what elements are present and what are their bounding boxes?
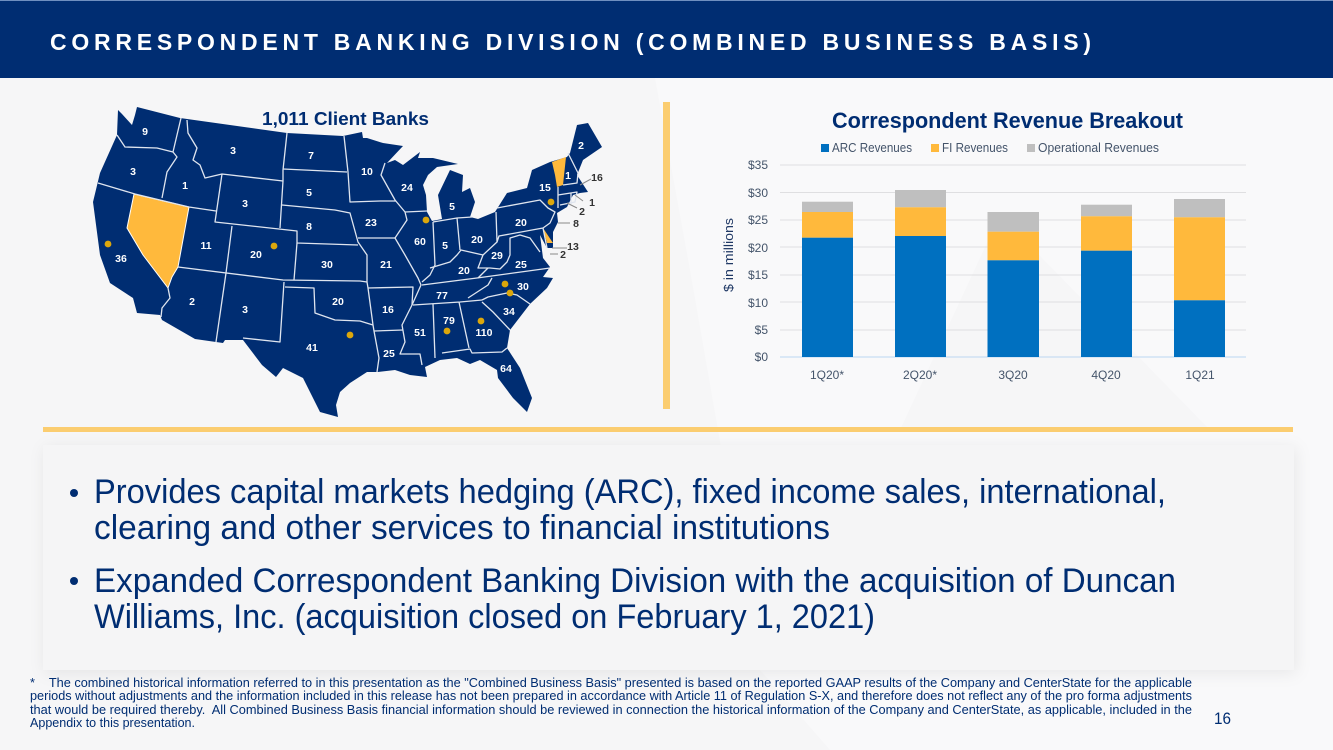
state client counts: 21 <box>380 259 392 271</box>
state client counts: 60 <box>414 236 426 248</box>
state client counts: 20 <box>332 296 344 308</box>
state client counts <box>115 126 584 375</box>
leader lines <box>550 179 591 254</box>
gridlines <box>780 165 1246 330</box>
small state counts: 2 <box>579 206 585 218</box>
state client counts: 41 <box>306 342 318 354</box>
state client counts: 29 <box>491 250 503 262</box>
state client counts: 2 <box>578 140 584 152</box>
bar: 2Q20 <box>895 190 946 357</box>
y axis labels: $20 <box>748 241 768 255</box>
state client counts: 3 <box>230 145 236 157</box>
y axis labels: $30 <box>748 186 768 200</box>
bullet one <box>70 473 1166 547</box>
chart title: Correspondent Revenue Breakout <box>832 108 1184 133</box>
state client counts: 3 <box>130 166 136 178</box>
state client counts: 51 <box>414 327 426 339</box>
bar: 4Q20 <box>1081 205 1132 357</box>
y axis labels: $0 <box>755 350 768 364</box>
panel: US map of client banks <box>93 107 603 417</box>
small state counts: 13 <box>567 241 579 253</box>
y axis title: $ in millions <box>722 218 736 292</box>
state client counts: 36 <box>115 253 127 265</box>
state client counts: 20 <box>458 265 470 277</box>
state borders <box>98 118 578 372</box>
state client counts: 11 <box>200 240 212 252</box>
state client counts: 25 <box>515 259 527 271</box>
footnote: that would be required thereby. All Combined Business Basis financial information should be reviewed in connection the historical information of the Company and CenterState, as applicable, included in the <box>30 703 1192 717</box>
state client counts: 79 <box>443 315 455 327</box>
footnote: Appendix to this presentation. <box>30 716 195 730</box>
state client counts: 5 <box>449 201 455 213</box>
x axis labels: 3Q20 <box>998 368 1028 382</box>
state client counts: 2 <box>189 296 195 308</box>
state client counts: 5 <box>306 187 312 199</box>
small state counts: 2 <box>560 249 566 261</box>
legend: ARC Revenues <box>832 141 912 155</box>
state client counts: 64 <box>500 363 512 375</box>
state client counts: 25 <box>383 348 395 360</box>
highlighted state: Vermont <box>552 157 566 187</box>
bullet two: Expanded Correspondent Banking Division with the acquisition of Duncan <box>94 562 1176 600</box>
heading: client banks: 1,011 Client Banks <box>262 109 429 129</box>
state client counts: 20 <box>250 249 262 261</box>
state client counts: 77 <box>436 290 448 302</box>
footnote: periods without adjustments and the information included in this release has not been prepared in accordance with Article 11 of Regulation S-X, and therefore does not reflect any of the pro forma adjustments <box>30 689 1192 703</box>
small state counts: 1 <box>589 197 595 209</box>
legend: Operational Revenues <box>1038 141 1159 155</box>
state client counts: 10 <box>361 166 373 178</box>
state client counts: 7 <box>308 150 314 162</box>
state client counts: 3 <box>242 304 248 316</box>
bullet one: clearing and other services to financial institutions <box>94 509 830 547</box>
bullet two <box>70 562 1176 636</box>
state client counts: 30 <box>321 259 333 271</box>
y axis labels: $25 <box>748 213 768 227</box>
state client counts: 1 <box>182 180 188 192</box>
state client counts: 8 <box>306 221 312 233</box>
state client counts: 3 <box>242 198 248 210</box>
panel: revenue chart <box>722 108 1246 382</box>
footnote <box>30 676 1192 730</box>
header banner <box>0 0 1333 78</box>
y axis labels: $15 <box>748 268 768 282</box>
small state counts <box>560 172 603 261</box>
state client counts: 110 <box>476 327 493 339</box>
state client counts: 24 <box>401 182 413 194</box>
map silhouette <box>93 107 602 417</box>
state client counts: 1 <box>565 170 571 182</box>
legend <box>821 141 1159 155</box>
y axis labels: $5 <box>755 323 768 337</box>
bar: 1Q20 <box>802 202 853 357</box>
title: CORRESPONDENT BANKING DIVISION (COMBINED BUSINESS BASIS) <box>50 29 1091 55</box>
highlighted state: Delaware <box>543 228 553 243</box>
x axis labels: 4Q20 <box>1091 368 1121 382</box>
highlighted state: Nevada <box>127 194 189 288</box>
small state counts: 16 <box>591 172 603 184</box>
page number: 16 <box>1214 709 1231 728</box>
y axis labels: $10 <box>748 296 768 310</box>
x axis labels: 1Q20* <box>810 368 844 382</box>
bullet one: Provides capital markets hedging (ARC), fixed income sales, international, <box>94 473 1166 511</box>
bar: 1Q21 <box>1174 199 1225 357</box>
vertical divider <box>663 102 670 409</box>
horizontal divider <box>43 427 1293 432</box>
y axis labels: $35 <box>748 158 768 172</box>
panel: key points <box>43 445 1294 670</box>
x axis labels: 2Q20* <box>903 368 937 382</box>
x axis labels: 1Q21 <box>1185 368 1215 382</box>
state client counts: 5 <box>442 240 448 252</box>
state client counts: 16 <box>382 304 394 316</box>
bullet two: Williams, Inc. (acquisition closed on February 1, 2021) <box>94 598 875 636</box>
small state counts: 8 <box>573 218 579 230</box>
y axis labels <box>748 158 768 364</box>
state client counts: 15 <box>539 182 551 194</box>
office location dots <box>105 199 554 338</box>
state client counts: 23 <box>365 217 377 229</box>
footnote: * The combined historical information referred to in this presentation as the "Combined Business Basis" presented is based on the reported GAAP results of the Company and CenterState for the applicable <box>30 676 1192 690</box>
legend: FI Revenues <box>942 141 1008 155</box>
state client counts: 20 <box>471 234 483 246</box>
state client counts: 30 <box>517 281 529 293</box>
bar: 3Q20 <box>988 212 1039 357</box>
state client counts: 20 <box>515 217 527 229</box>
state client counts: 9 <box>142 126 148 138</box>
x axis labels <box>810 368 1215 382</box>
state client counts: 34 <box>503 306 515 318</box>
